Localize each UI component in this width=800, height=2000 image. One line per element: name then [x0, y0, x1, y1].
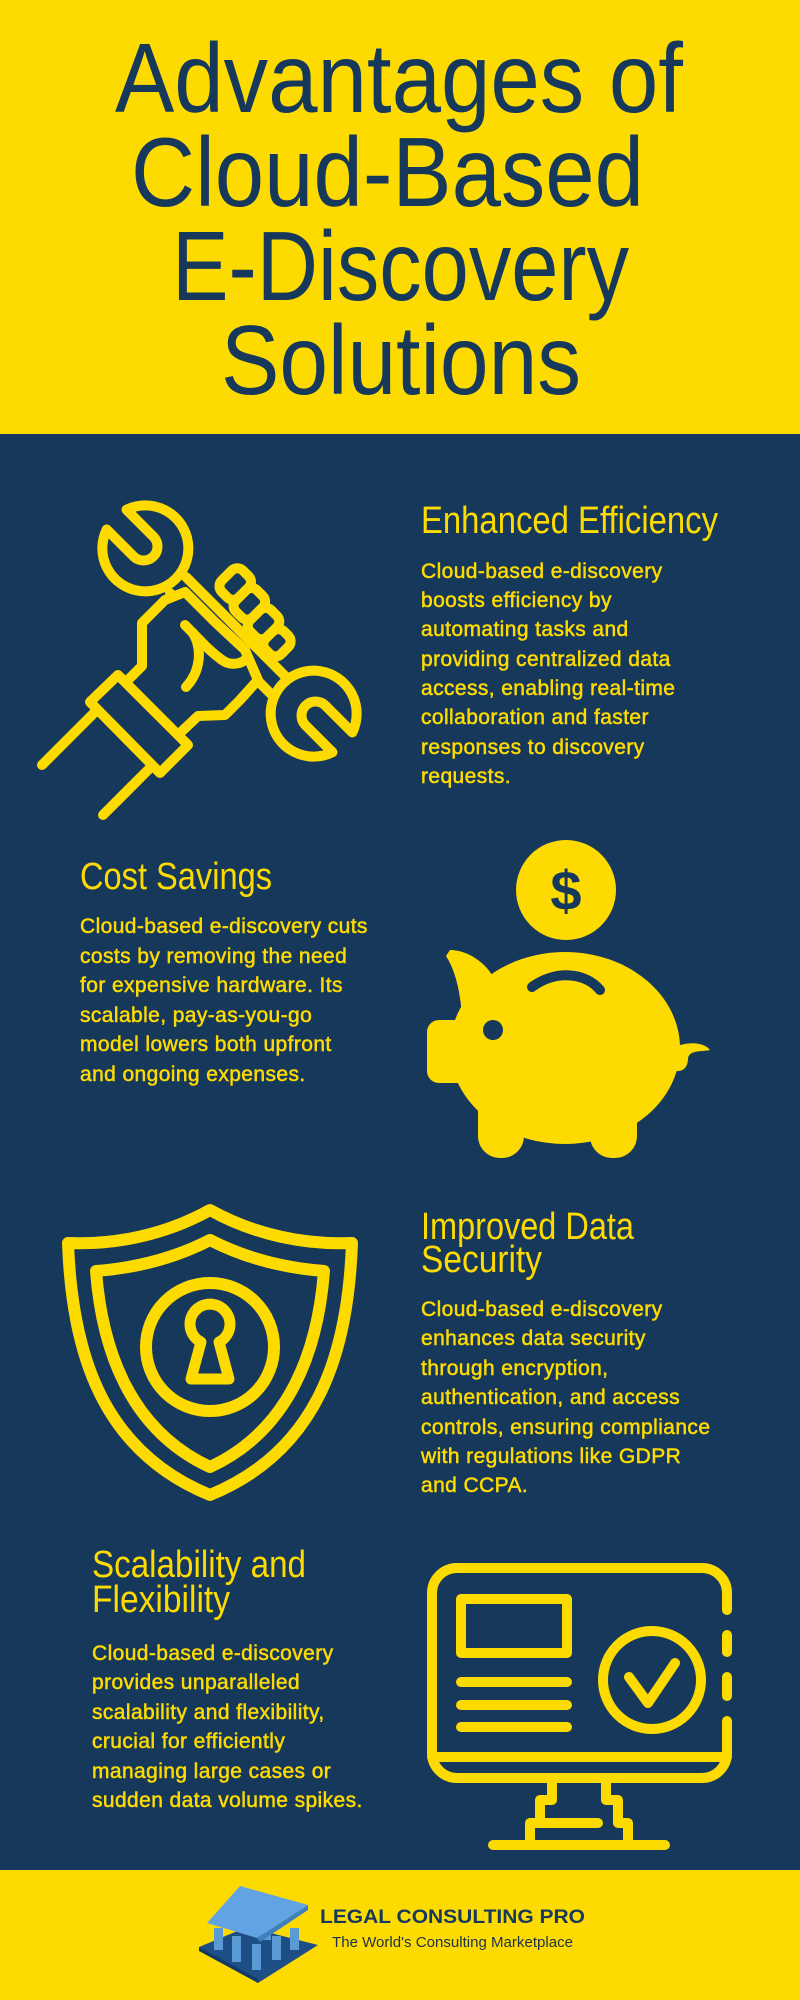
text: cost body: model lowers both upfront [80, 1033, 332, 1056]
text: scalability body: Cloud-based e-discovery [92, 1642, 334, 1665]
heading: Scalability and Flexibility: Flexibility [92, 1579, 230, 1621]
title: Advantages of [115, 23, 684, 133]
text: efficiency body: responses to discovery [421, 736, 645, 759]
heading: Improved Data Security: Security [421, 1239, 542, 1281]
text: efficiency body: automating tasks and [421, 618, 629, 641]
heading: Enhanced Efficiency: Enhanced Efficiency [421, 500, 718, 542]
text: security body: Cloud-based e-discovery [421, 1298, 663, 1321]
text: security body: with regulations like GDPR [420, 1445, 681, 1468]
panel: improved data security [68, 1206, 710, 1497]
text: security body: controls, ensuring compliance [421, 1416, 710, 1439]
text: cost body: and ongoing expenses. [80, 1063, 306, 1086]
text: efficiency body [421, 560, 675, 788]
text: security body: enhances data security [421, 1327, 646, 1350]
text: efficiency body: boosts efficiency by [421, 589, 612, 612]
text: brand name: LEGAL CONSULTING PRO [320, 1906, 585, 1928]
footer band [0, 1870, 800, 2000]
panel: cost savings [80, 840, 710, 1158]
text: scalability body: sudden data volume spikes. [92, 1789, 363, 1812]
icon: shield with keyhole [68, 1210, 352, 1495]
title: Cloud-Based [131, 117, 644, 227]
text: security body: through encryption, [421, 1357, 608, 1380]
text: scalability body: provides unparalleled [92, 1671, 300, 1694]
text: security body [420, 1298, 710, 1497]
text: cost body [80, 915, 368, 1086]
text: scalability body: scalability and flexibility, [92, 1701, 325, 1724]
text: cost body: Cloud-based e-discovery cuts [80, 915, 368, 938]
text: tagline: The World's Consulting Marketplace [332, 1934, 573, 1951]
text: scalability body: crucial for efficiently [92, 1730, 285, 1753]
icon: courthouse logo [199, 1886, 318, 1983]
heading: Cost Savings: Cost Savings [80, 856, 272, 898]
title: Solutions [221, 305, 581, 415]
icon: monitor with checkmark [432, 1568, 727, 1845]
heading: Scalability and Flexibility [92, 1544, 306, 1621]
heading: Scalability and Flexibility: Scalability and [92, 1544, 306, 1586]
text: scalability body: managing large cases or [92, 1760, 331, 1783]
text: efficiency body: requests. [421, 765, 511, 788]
icon: piggy bank with coin: $ [550, 859, 582, 922]
navy body panel [0, 434, 800, 1870]
header band [0, 0, 800, 434]
heading: Improved Data Security [421, 1206, 635, 1281]
title: E-Discovery [172, 211, 629, 321]
icon: hand with wrench [42, 505, 357, 815]
panel: scalability and flexibility [92, 1544, 727, 1845]
heading: Improved Data Security: Improved Data [421, 1206, 635, 1248]
text: scalability body [92, 1642, 363, 1812]
text: efficiency body: collaboration and faster [421, 706, 649, 729]
title [115, 23, 684, 415]
panel: enhanced efficiency [42, 500, 718, 815]
text: cost body: scalable, pay-as-you-go [80, 1004, 312, 1027]
text: security body: and CCPA. [421, 1474, 528, 1497]
text: efficiency body: providing centralized data [421, 648, 671, 671]
text: efficiency body: Cloud-based e-discovery [421, 560, 663, 583]
icon: piggy bank with coin [427, 840, 710, 1158]
text: security body: authentication, and access [421, 1386, 680, 1409]
text: cost body: for expensive hardware. Its [80, 974, 343, 997]
footer: logo [199, 1886, 585, 1983]
text: cost body: costs by removing the need [80, 945, 347, 968]
text: efficiency body: access, enabling real-time [421, 677, 675, 700]
